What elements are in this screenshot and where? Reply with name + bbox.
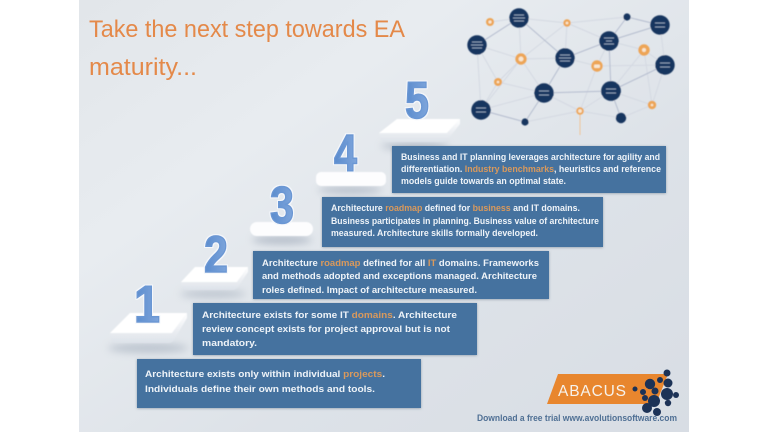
slide background	[79, 0, 689, 432]
level 4 text: measured. Architecture skills formally developed.	[331, 227, 538, 238]
number 4: 4	[334, 125, 357, 183]
number 2: 2	[204, 226, 228, 284]
node captions	[471, 15, 670, 112]
orange node icons	[488, 20, 653, 113]
title: maturity...	[89, 54, 197, 81]
dark nodes	[467, 8, 675, 126]
logo: Abacus	[547, 370, 679, 416]
panel: level 1	[137, 359, 421, 408]
level 2 text: mandatory.	[202, 337, 257, 348]
logo name: ABACUS	[558, 383, 626, 400]
step 2 shadow	[180, 290, 246, 298]
level 2 text: review concept exists for project approval but is not	[202, 323, 450, 334]
step 4	[316, 125, 386, 194]
step 4 platform	[316, 172, 386, 186]
step 2 platform	[181, 267, 248, 290]
logo banner	[547, 374, 668, 404]
step 5 platform	[379, 119, 460, 142]
level 5 text: models guide towards an optimal state.	[401, 175, 566, 186]
step 5 shadow	[381, 142, 449, 150]
title	[89, 16, 405, 81]
level 2 text	[202, 309, 457, 348]
level 3 text	[262, 257, 539, 295]
level 3 text: and methods adopted and exceptions managed. Architecture	[262, 270, 537, 281]
step 4 shadow	[318, 186, 382, 194]
step 2	[180, 226, 248, 298]
orange nodes	[486, 18, 656, 115]
level 5 text: Business and IT planning leverages architecture for agility and	[401, 151, 660, 162]
level 2 text: Architecture exists for some IT domains . Architecture	[202, 309, 457, 320]
level 3 text: roles defined. Impact of architecture measured.	[262, 284, 477, 295]
number 3: 3	[270, 177, 294, 235]
panel: level 5	[392, 146, 666, 193]
step 3 platform	[250, 222, 313, 236]
step 1	[108, 276, 188, 353]
logo dots	[632, 370, 679, 416]
step 3 shadow	[252, 236, 312, 244]
level 4 text: Business participates in planning. Business value of architecture	[331, 215, 599, 226]
panel: level 2	[193, 303, 477, 355]
orange stem	[579, 111, 581, 135]
level 1 text	[145, 368, 385, 394]
network connections	[477, 17, 665, 122]
level 3 text: Architecture roadmap defined for all IT domains. Frameworks	[262, 257, 539, 268]
step 1 shadow	[108, 343, 188, 353]
level 4 text	[331, 202, 599, 238]
download link: Download a free trial www.avolutionsoftware.com	[477, 413, 677, 423]
step 3	[250, 177, 313, 244]
level 5 text: differentiation. Industry benchmarks, heuristics and reference	[401, 163, 661, 174]
panel: level 3	[253, 251, 549, 299]
darker connections	[477, 17, 665, 122]
level 5 text	[401, 151, 661, 186]
step 5	[379, 72, 460, 150]
level 4 text: Architecture roadmap defined for business and IT domains.	[331, 202, 580, 213]
number 5: 5	[405, 72, 429, 130]
title: Take the next step towards EA	[89, 16, 405, 43]
number 1: 1	[134, 276, 160, 334]
level 1 text: Individuals define their own methods and tools.	[145, 383, 375, 394]
network diagram	[467, 8, 675, 135]
step 1 platform	[110, 313, 187, 343]
panel: level 4	[322, 197, 603, 247]
level 1 text: Architecture exists only within individual projects .	[145, 368, 385, 379]
